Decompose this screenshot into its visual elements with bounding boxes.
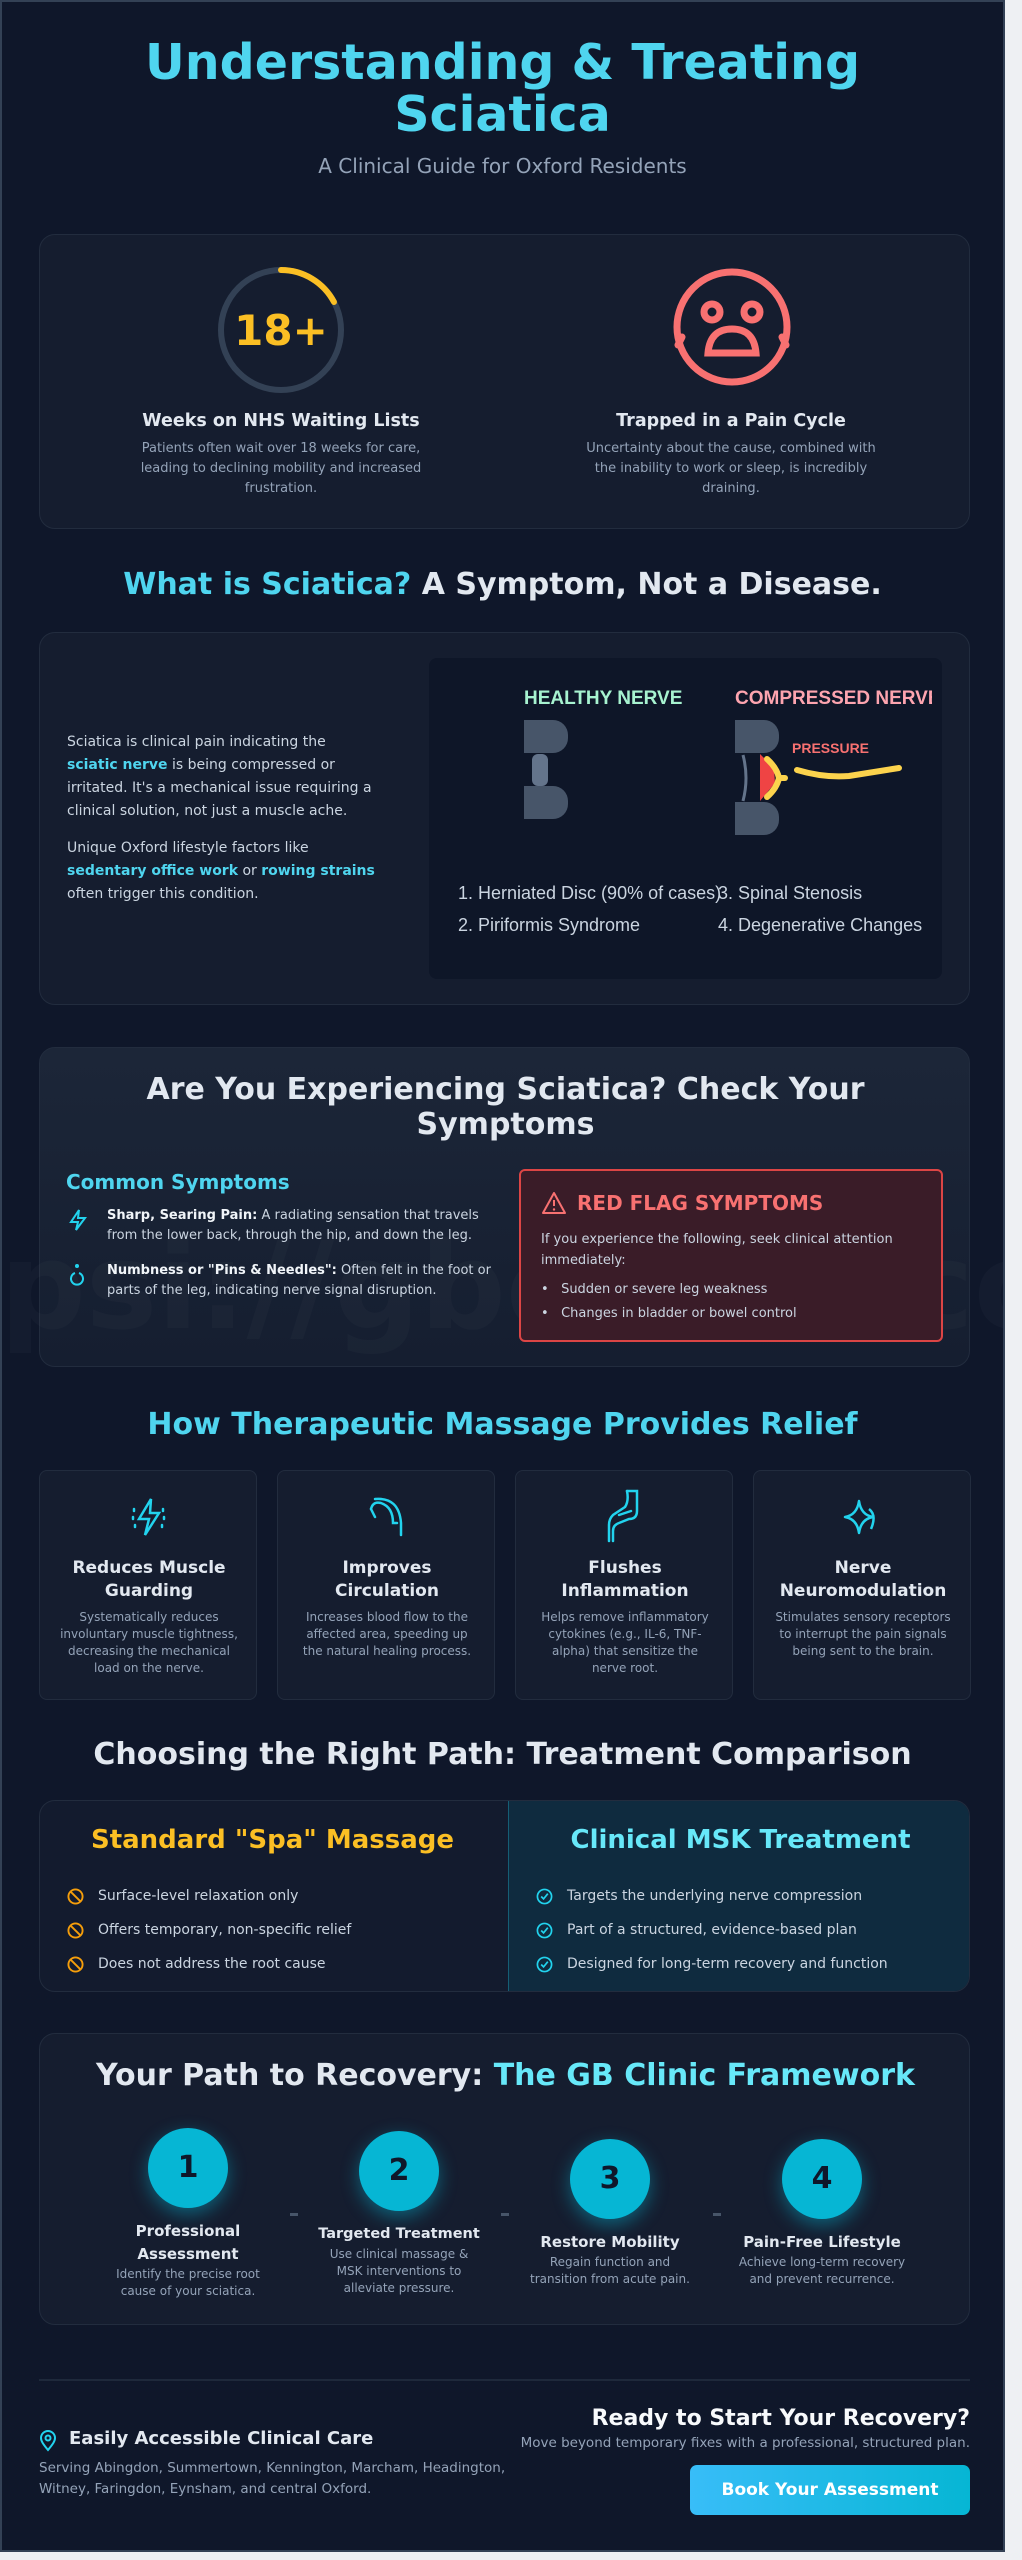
callout: red flag symptoms: • Changes in bladder or bowel control [541, 1306, 797, 1321]
stat: pain cycle [586, 411, 876, 496]
icon: progress ring 18+: 18+ [234, 306, 328, 355]
stat: waiting lists: Weeks on NHS Waiting Lists [142, 411, 420, 431]
footer: call to action [521, 2406, 970, 2515]
text block: explanation [67, 734, 375, 902]
icon: joint [608, 1490, 638, 1542]
step 4 [739, 2136, 905, 2286]
stat: waiting lists [141, 411, 421, 496]
column: spa massage: Surface-level relaxation only [98, 1888, 298, 1904]
icon: lightning [69, 1210, 87, 1231]
footer: call to action: Ready to Start Your Recovery? [592, 2406, 970, 2431]
heading: check symptoms: Symptoms [417, 1107, 594, 1142]
icon: flow [370, 1498, 402, 1536]
panel: comparison [39, 1800, 970, 1992]
card: muscle guarding [39, 1470, 257, 1700]
arrow connector [713, 2213, 721, 2216]
step 2: Use clinical massage & MSK interventions to alleviate pressure. [330, 2247, 468, 2295]
icon: map pin [40, 2430, 56, 2452]
heading: massage relief: How Therapeutic Massage Provides Relief [147, 1407, 858, 1442]
callout: red flag symptoms: • Sudden or severe leg weakness [541, 1282, 767, 1297]
heading: common symptoms: Common Symptoms [66, 1170, 290, 1194]
text: Easily Accessible Clinical Care [69, 2428, 373, 2449]
panel: stats [39, 234, 970, 529]
chart: nerve diagram: 1. Herniated Disc (90% of cases) [458, 883, 721, 903]
chart: nerve diagram: COMPRESSED NERVE [735, 688, 941, 709]
text block: explanation: often trigger this condition. [67, 886, 259, 902]
stat: pain cycle: Trapped in a Pain Cycle [616, 411, 846, 431]
chart: nerve diagram: 3. Spinal Stenosis [718, 883, 862, 903]
chart: nerve diagram: 4. Degenerative Changes [718, 915, 922, 935]
text block: explanation: clinical solution, not just a muscle ache. [67, 803, 347, 819]
step 1: 1 [178, 2150, 198, 2185]
button: book assessment: Book Your Assessment [721, 2480, 938, 2500]
title: Sciatica [394, 86, 611, 143]
text block: explanation: irritated. It's a mechanical issue requiring a [67, 780, 372, 796]
chart: nerve diagram: 2. Piriformis Syndrome [458, 915, 640, 935]
column: spa massage: Offers temporary, non-specific relief [98, 1922, 351, 1938]
panel: what is sciatica [39, 632, 970, 1005]
card: circulation [277, 1470, 495, 1700]
arrow connector [290, 2213, 298, 2216]
title [145, 34, 860, 143]
icon: progress ring 18+ [218, 267, 344, 393]
heading: what is sciatica: What is Sciatica? A Symptom, Not a Disease. [123, 567, 882, 602]
column: clinical msk: Targets the underlying nerve compression [567, 1888, 862, 1904]
text block: explanation: Unique Oxford lifestyle factors like [67, 840, 309, 856]
heading: treatment comparison: Choosing the Right Path: Treatment Comparison [93, 1737, 912, 1772]
callout: red flag symptoms [519, 1169, 943, 1342]
column: clinical msk [508, 1800, 971, 1993]
footer: location [39, 2428, 505, 2497]
callout: red flag symptoms: If you experience the following, seek clinical attention immediately: [541, 1232, 893, 1268]
text: Serving Abingdon, Summertown, Kennington, Marcham, Headington, Witney, Faringdon, Eynsham, and central Oxford. [39, 2460, 505, 2497]
column: clinical msk: Clinical MSK Treatment [570, 1825, 911, 1855]
button: book assessment [690, 2465, 970, 2515]
step 1 [116, 2124, 260, 2298]
column: spa massage: Does not address the root cause [98, 1956, 326, 1972]
subtitle: A Clinical Guide for Oxford Residents [318, 154, 687, 178]
step 1: Professional Assessment [136, 2222, 240, 2263]
text block: explanation: sciatic nerve is being compressed or [67, 757, 335, 773]
card: muscle guarding: Reduces Muscle Guarding [72, 1558, 226, 1601]
step 2 [318, 2128, 480, 2295]
panel: recovery path [39, 2033, 970, 2325]
heading: recovery path: Your Path to Recovery: The GB Clinic Framework [96, 2058, 915, 2093]
card: inflammation [515, 1470, 733, 1700]
symptom: numbness: Numbness or "Pins & Needles": Often felt in the foot or parts of the leg, indicating nerve signal disruption. [107, 1263, 491, 1298]
heading: check symptoms [146, 1072, 865, 1142]
card: circulation: Increases blood flow to the affected area, speeding up the natural healing process. [303, 1610, 471, 1658]
text block: explanation: sedentary office work or rowing strains [67, 863, 375, 879]
heading: check symptoms: Are You Experiencing Sciatica? Check Your [146, 1072, 865, 1107]
card: circulation: Improves Circulation [335, 1558, 439, 1601]
stat: waiting lists: Patients often wait over 18 weeks for care, leading to declining mobility and increased frustration. [141, 441, 421, 496]
card: inflammation: Flushes Inflammation [561, 1558, 689, 1601]
stat: pain cycle: Uncertainty about the cause, combined with the inability to work or sleep, is incredibly draining. [586, 441, 876, 496]
icon: warning [542, 1192, 566, 1214]
step 4: Pain-Free Lifestyle [743, 2233, 901, 2251]
icon: sparkle [844, 1500, 875, 1534]
step 4: 4 [812, 2161, 832, 2196]
step 3: Regain function and transition from acute pain. [530, 2255, 690, 2286]
chart: nerve diagram [458, 690, 932, 935]
step 3: 3 [600, 2161, 620, 2196]
chart: nerve diagram: PRESSURE [792, 740, 869, 756]
step 4: Achieve long-term recovery and prevent recurrence. [739, 2255, 905, 2286]
step 2: Targeted Treatment [318, 2226, 480, 2242]
panel: symptoms [39, 1047, 970, 1367]
column: spa massage: Standard "Spa" Massage [91, 1825, 454, 1855]
arrow connector [501, 2213, 509, 2216]
text block: explanation: Sciatica is clinical pain indicating the [67, 734, 326, 750]
step 3: Restore Mobility [540, 2233, 680, 2251]
column: clinical msk: Designed for long-term recovery and function [567, 1956, 888, 1972]
card: neuromodulation: Stimulates sensory receptors to interrupt the pain signals being sent to the brain. [775, 1610, 951, 1658]
card: neuromodulation [753, 1470, 971, 1700]
callout: red flag symptoms: RED FLAG SYMPTOMS [577, 1191, 823, 1215]
icon: pins and needles [70, 1264, 84, 1286]
card: muscle guarding: Systematically reduces involuntary muscle tightness, decreasing the mechanical load on the nerve. [60, 1610, 238, 1675]
step 1: Identify the precise root cause of your sciatica. [116, 2267, 260, 2298]
step 2: 2 [389, 2153, 409, 2188]
chart: nerve diagram: HEALTHY NERVE [524, 688, 682, 709]
symptom: sharp pain: Sharp, Searing Pain: A radiating sensation that travels from the lower back, through the hip, and down the leg. [107, 1208, 479, 1243]
icon: sad face [674, 268, 790, 386]
column: spa massage [68, 1825, 454, 1972]
step 3 [530, 2136, 690, 2286]
title: Understanding & Treating [145, 34, 860, 91]
footer: call to action: Move beyond temporary fixes with a professional, structured plan. [521, 2435, 970, 2451]
column: clinical msk: Part of a structured, evidence-based plan [567, 1922, 857, 1938]
card: neuromodulation: Nerve Neuromodulation [780, 1558, 946, 1601]
icon: bolt [132, 1498, 166, 1536]
card: inflammation: Helps remove inflammatory cytokines (e.g., IL-6, TNF-alpha) that sensitize the nerve root. [541, 1610, 709, 1675]
